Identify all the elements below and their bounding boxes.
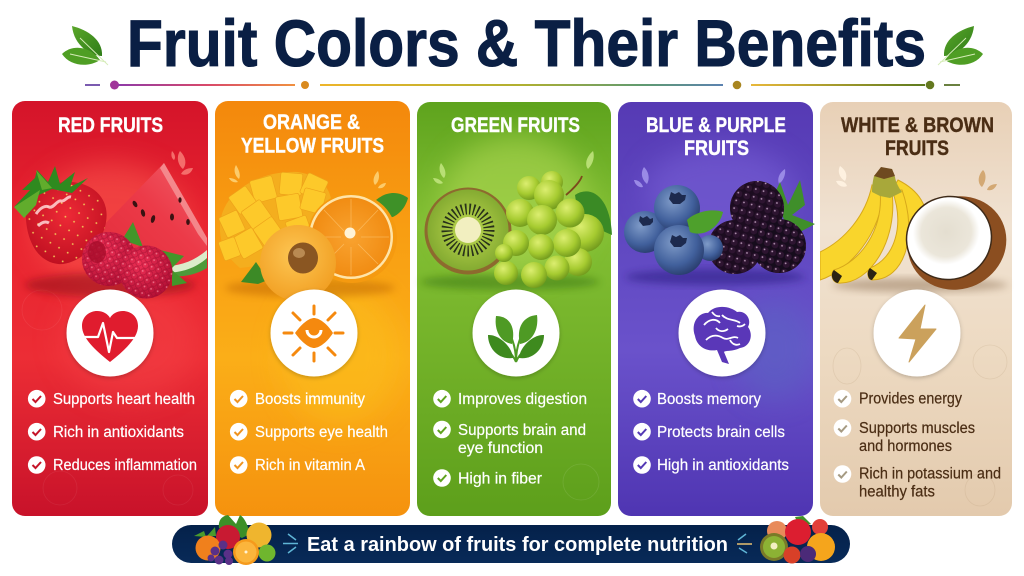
heading: orange and yellow: YELLOW FRUITS: [241, 134, 384, 158]
kiwi: [424, 188, 512, 274]
fruit group: blueberries and blackberries: [624, 180, 815, 285]
heading: red fruits: RED FRUITS: [58, 113, 163, 137]
benefit list: green: Supports brain and: [458, 422, 586, 439]
benefit list: orange: Rich in vitamin A: [255, 457, 366, 474]
benefit list: white and brown: Provides energy: [859, 390, 962, 408]
splash: red: [171, 151, 193, 175]
icon: sprout leaves: [472, 290, 560, 376]
splash: green: [433, 151, 594, 184]
watermelon: [97, 163, 207, 277]
panel: green fruits: [417, 102, 612, 516]
benefit list: white and brown: [834, 390, 1001, 500]
splash: tan: [979, 170, 997, 190]
icon: left arrow accents: [283, 534, 298, 553]
fruit group: kiwi and grapes: [420, 171, 612, 290]
benefit list: red: Reduces inflammation: [53, 457, 197, 474]
benefit list: red: [28, 390, 197, 474]
panel: blue and purple fruits: [618, 102, 815, 516]
panel: white and brown fruits: [820, 102, 1022, 516]
benefit list: green: [433, 390, 587, 488]
banner: eat a rainbow: [172, 515, 850, 565]
left fruit bunch: [194, 515, 276, 565]
splash: cream: [836, 166, 847, 187]
icon: heart with pulse: [66, 290, 154, 376]
icon: left leaves: [62, 26, 108, 65]
coconut: [892, 180, 1022, 306]
heading: orange and yellow: [241, 110, 384, 158]
benefit list: orange: Boosts immunity: [255, 391, 365, 408]
icon: brain: [678, 290, 766, 376]
benefit list: green: High in fiber: [458, 470, 542, 488]
banner text: Eat a rainbow of fruits for complete nutrition: [307, 534, 728, 556]
benefit list: red: Rich in antioxidants: [53, 424, 184, 441]
benefit list: orange: Supports eye health: [255, 424, 388, 441]
apricot: [241, 225, 336, 301]
mango: [218, 172, 332, 268]
splash: orange: [229, 165, 386, 188]
strawberry: [14, 166, 107, 264]
fruit group: strawberry, watermelon and raspberries: [14, 163, 207, 298]
heading: white and brown: WHITE & BROWN: [841, 113, 994, 137]
fruit group: mango, orange and apricot: [218, 172, 408, 301]
icon: lightning bolt: [874, 290, 960, 376]
benefit list: purple: High in antioxidants: [657, 457, 789, 474]
benefit list: purple: [633, 390, 789, 474]
heading: blue and purple: BLUE & PURPLE: [646, 113, 786, 137]
benefit list: white and brown: Supports muscles: [859, 420, 975, 437]
heading: blue and purple: [646, 113, 786, 160]
icon: right arrow accents: [737, 534, 752, 553]
benefit list: purple: Boosts memory: [657, 391, 761, 408]
benefit list: green: Improves digestion: [458, 391, 587, 408]
splash: purple: [634, 167, 785, 187]
benefit list: orange: [230, 390, 388, 474]
blueberries: [624, 185, 723, 275]
benefit list: red: Supports heart health: [53, 391, 195, 408]
icon: sun and eye: [270, 290, 358, 376]
benefit list: white and brown: healthy fats: [859, 484, 935, 500]
grapes: [494, 171, 612, 288]
benefit list: white and brown: Rich in potassium and: [859, 466, 1001, 482]
heading: blue and purple: FRUITS: [684, 136, 749, 160]
fruit group: bananas and coconut: [820, 167, 1008, 296]
panel: red fruits: [12, 101, 208, 516]
benefit list: green: eye function: [458, 440, 543, 457]
orange half: [307, 193, 408, 283]
bananas: [820, 167, 928, 283]
blackberries: [708, 180, 815, 274]
right fruit bunch: [760, 516, 835, 564]
benefit list: purple: Protects brain cells: [657, 424, 785, 441]
icon: right leaves: [938, 26, 983, 65]
title: Fruit Colors & Their Benefits: [127, 6, 926, 80]
heading: white and brown: FRUITS: [885, 136, 949, 160]
heading: orange and yellow: ORANGE &: [263, 110, 360, 134]
raspberries: [82, 222, 187, 298]
benefit list: white and brown: and hormones: [859, 438, 952, 455]
panel: orange and yellow fruits: [215, 101, 410, 516]
heading: green fruits: GREEN FRUITS: [451, 113, 580, 137]
title divider: [85, 80, 960, 90]
heading: white and brown: [841, 113, 994, 160]
